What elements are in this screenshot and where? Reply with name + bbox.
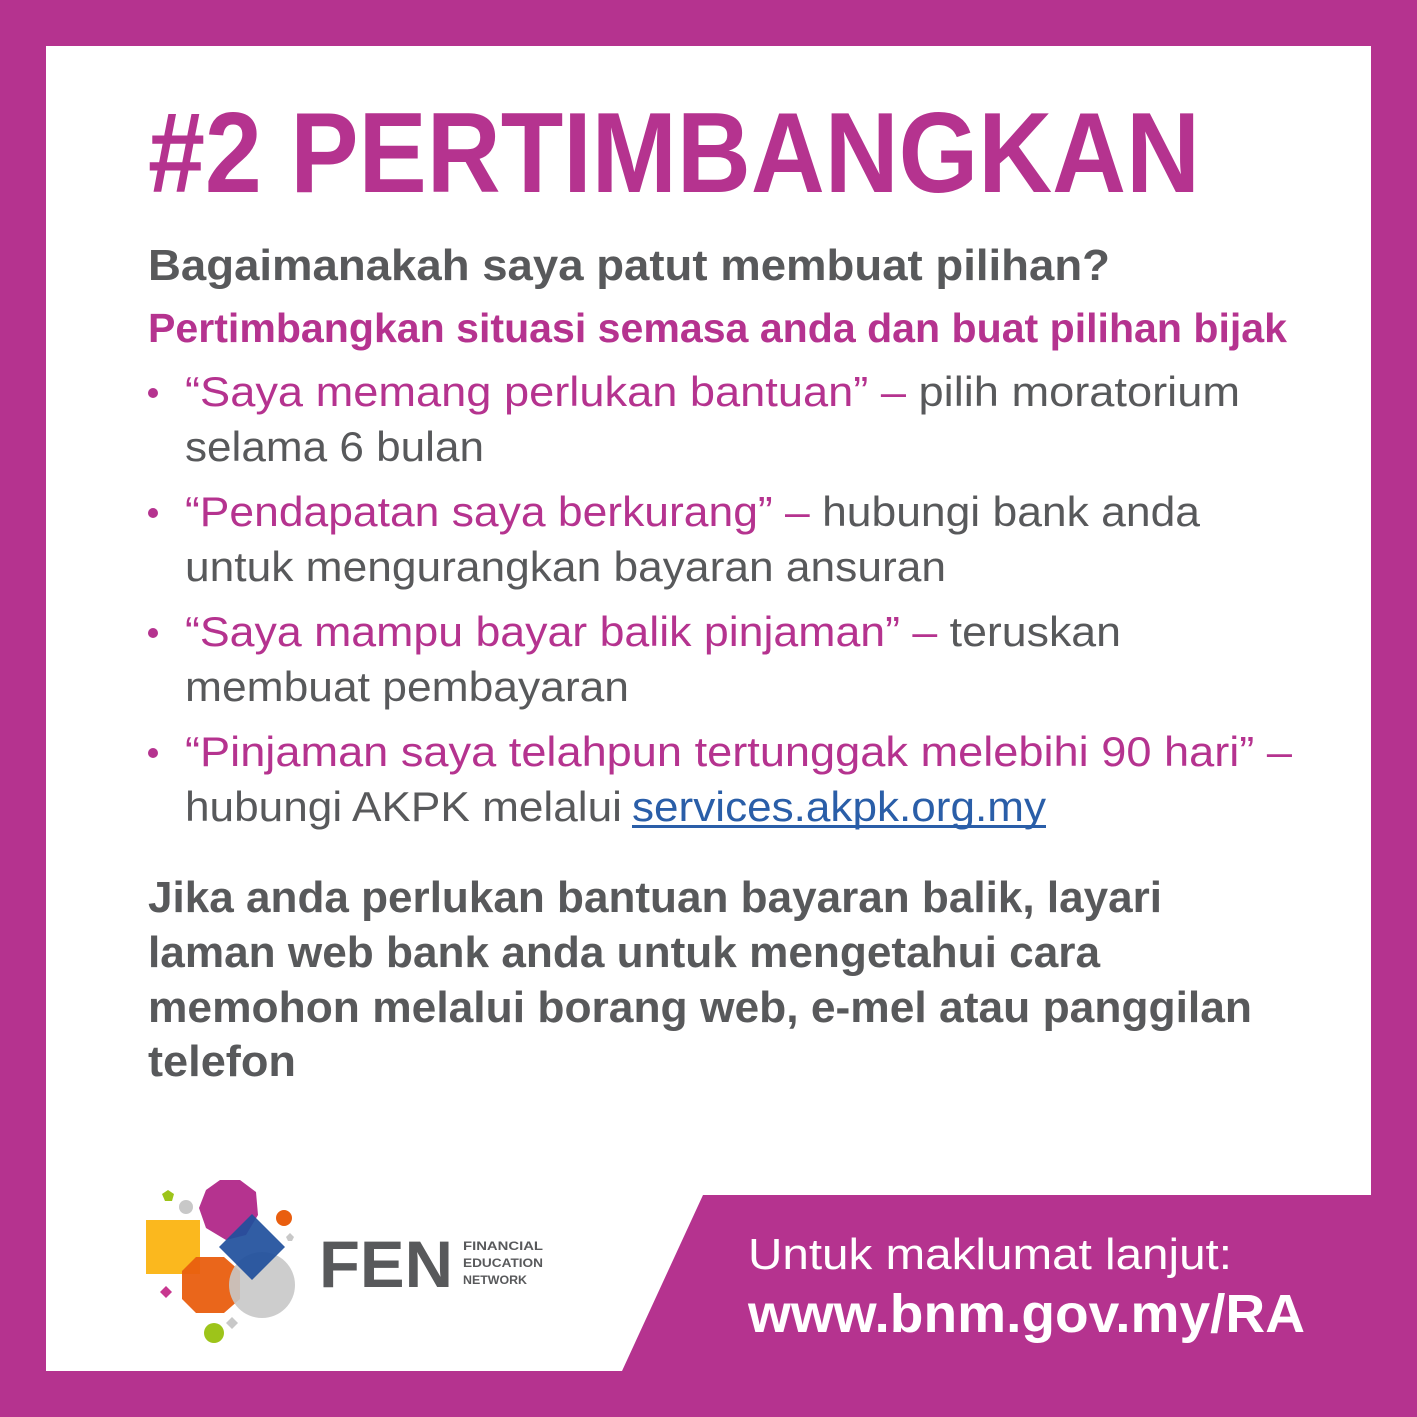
bullet list [148,368,1293,830]
bullet 1: “Saya memang perlukan bantuan” – pilih moratorium [185,368,1240,415]
callout: more info: Untuk maklumat lanjut: [748,1230,1232,1279]
logo: FEN: NETWORK [463,1273,527,1287]
paragraph: repayment help: memohon melalui borang web, e-mel atau panggilan [148,983,1252,1032]
bullet 4: “Pinjaman saya telahpun tertunggak melebihi 90 hari” – [185,728,1293,775]
paragraph: repayment help [148,873,1252,1086]
subheading: Pertimbangkan situasi semasa anda dan buat pilihan bijak [148,305,1287,351]
FEN wordmark: FEN [319,1227,453,1301]
bullet 1: selama 6 bulan [185,423,484,470]
question heading: Bagaimanakah saya patut membuat pilihan? [148,241,1110,290]
title: #2 PERTIMBANGKAN [148,90,1200,217]
bullet 2: untuk mengurangkan bayaran ansuran [185,543,946,590]
bullet 2 [148,488,1201,590]
link: services.akpk.org.my [632,783,1046,830]
bullet 4: hubungi AKPK melalui [185,783,622,830]
bullet 3: “Saya mampu bayar balik pinjaman” – teruskan [185,608,1121,655]
bullet 3 [148,608,1121,710]
bullet 3: membuat pembayaran [185,663,629,710]
bullet 2: “Pendapatan saya berkurang” – hubungi bank anda [185,488,1201,535]
logo: FEN: FINANCIAL [463,1239,543,1253]
logo: FEN [146,1180,543,1343]
paragraph: repayment help: laman web bank anda untuk mengetahui cara [148,928,1101,977]
paragraph: repayment help: Jika anda perlukan bantuan bayaran balik, layari [148,873,1162,922]
bullet 4 [148,728,1293,830]
callout: more info [747,1230,1305,1344]
paragraph: repayment help: telefon [148,1037,296,1086]
callout: more info: www.bnm.gov.my/RA [747,1284,1305,1344]
logo: FEN: EDUCATION [463,1256,543,1270]
bullet 1 [148,368,1240,470]
icon: logo shapes [146,1180,295,1343]
